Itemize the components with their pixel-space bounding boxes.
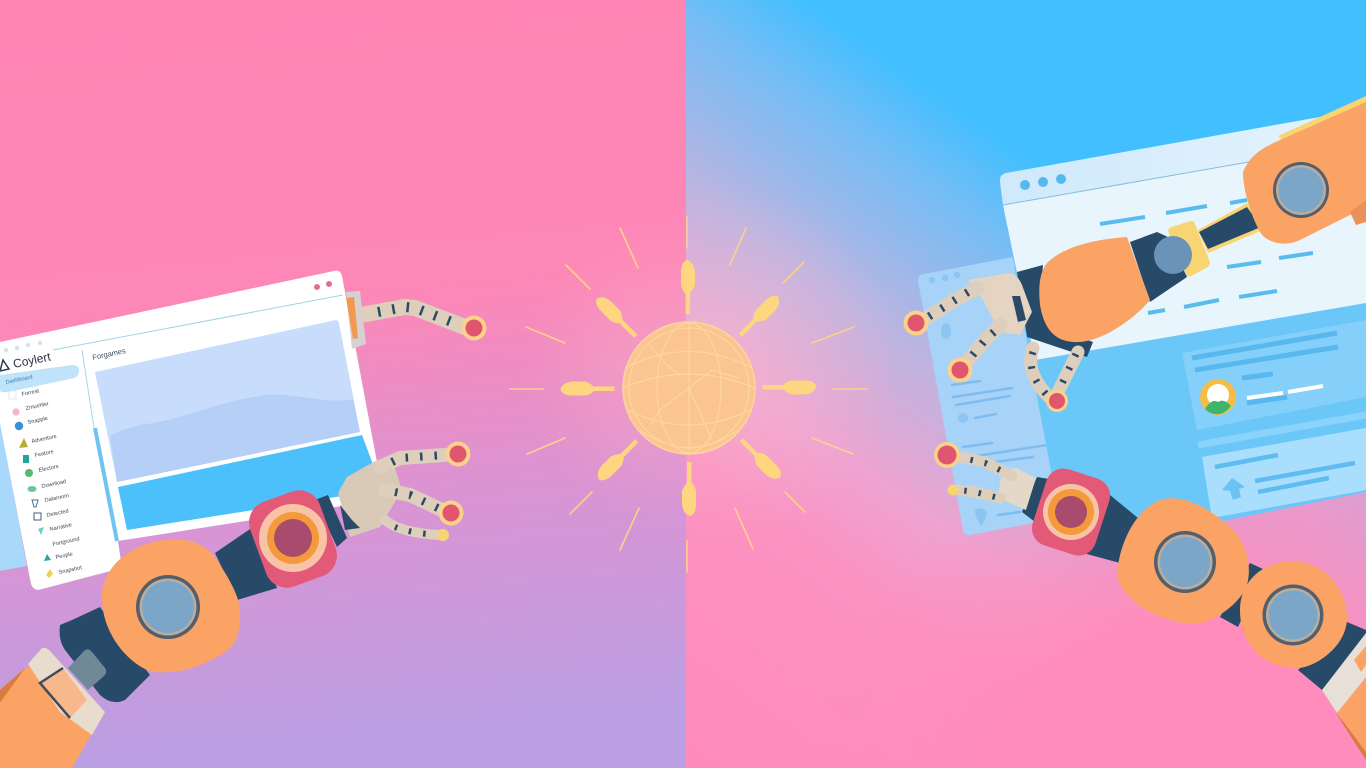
orange joint two	[1240, 561, 1347, 668]
central globe hub with radiating connectors	[510, 217, 867, 572]
blue content band	[118, 435, 380, 530]
back window	[918, 257, 1053, 535]
dash text lines	[1100, 200, 1313, 313]
panel heading: Forgames	[92, 346, 127, 362]
sidebar labels: Snapshot	[58, 565, 83, 576]
collar and forearm	[1322, 633, 1366, 760]
main window frame	[1000, 109, 1366, 550]
sidebar labels: Download	[41, 479, 67, 490]
header divider	[1003, 160, 1260, 205]
band between cards	[1198, 415, 1366, 445]
main window body	[1003, 142, 1366, 360]
connector prongs	[560, 260, 816, 516]
sidebar labels: Dashboard	[5, 374, 33, 386]
window body	[0, 271, 380, 590]
logo mark	[0, 360, 9, 371]
sidebar labels: Detected	[46, 508, 69, 519]
control dots	[1020, 174, 1066, 190]
header divider line	[53, 295, 343, 350]
background: lower right lilac wash	[1050, 300, 1366, 768]
sidebar labels: Fortground	[52, 536, 80, 548]
background: left glow	[520, 220, 686, 520]
dark forearm behind elbow	[1017, 265, 1093, 357]
sidebar labels	[5, 374, 83, 576]
bracket	[346, 291, 366, 349]
sidebar labels: Electors	[38, 464, 59, 474]
sidebar labels: Feature	[34, 449, 54, 459]
window control dots left	[4, 341, 42, 352]
radiating thin rays	[510, 217, 867, 572]
dark links	[1022, 477, 1366, 690]
background: pink to purple left half	[0, 0, 686, 768]
sidebar labels: Adventure	[31, 434, 57, 445]
background: lower right pink wash	[800, 430, 1366, 768]
sidebar divider	[82, 350, 117, 541]
sidebar labels: People	[55, 551, 73, 561]
main window header	[1000, 109, 1366, 205]
sidebar icons	[9, 391, 53, 578]
avatar	[1200, 379, 1236, 415]
sidebar labels: Zmuehler	[25, 401, 50, 412]
brand name: Coylert	[12, 349, 52, 371]
orange upper joint	[1243, 96, 1366, 244]
gripper hand	[338, 442, 470, 541]
right browser windows	[918, 109, 1366, 550]
sidebar labels: Snapple	[27, 416, 48, 426]
sidebar labels: Dataroom	[44, 493, 70, 504]
upload card	[1202, 428, 1366, 518]
left upper gripper behind window	[346, 291, 486, 349]
gripper hand	[904, 273, 1078, 412]
orange shoulder joint	[102, 539, 240, 672]
chart panel with wave	[95, 320, 360, 482]
orange elbow	[1039, 237, 1150, 342]
gripper hand	[934, 442, 1036, 510]
left lower robotic arm	[0, 442, 470, 768]
sidebar labels: Forrest	[21, 388, 40, 398]
window control dots right	[314, 281, 332, 290]
profile card	[1182, 320, 1366, 430]
sidebar labels: Narrative	[49, 522, 73, 533]
left back panel sliver	[0, 420, 27, 571]
yellow clamp	[1168, 221, 1210, 277]
finger	[366, 307, 465, 327]
wrist and elbow links	[60, 495, 347, 702]
right lower robotic arm	[934, 442, 1366, 760]
orange joint one	[1117, 498, 1249, 624]
left browser window with sidebar	[0, 271, 380, 590]
blue pivot	[1154, 236, 1192, 274]
background: central glow	[686, 180, 900, 540]
right upper robotic arm	[904, 96, 1366, 412]
background: blue to pink right half	[686, 0, 1366, 768]
dark rod with yellow edges	[1198, 203, 1263, 253]
dark wrist link	[1130, 232, 1187, 302]
fingertip	[462, 316, 486, 340]
active sidebar pill	[0, 365, 79, 392]
grey coupling	[68, 649, 106, 690]
red joint	[1027, 464, 1115, 560]
red wrist joint	[243, 484, 343, 594]
globe	[623, 322, 755, 454]
orange forearm	[0, 648, 105, 768]
